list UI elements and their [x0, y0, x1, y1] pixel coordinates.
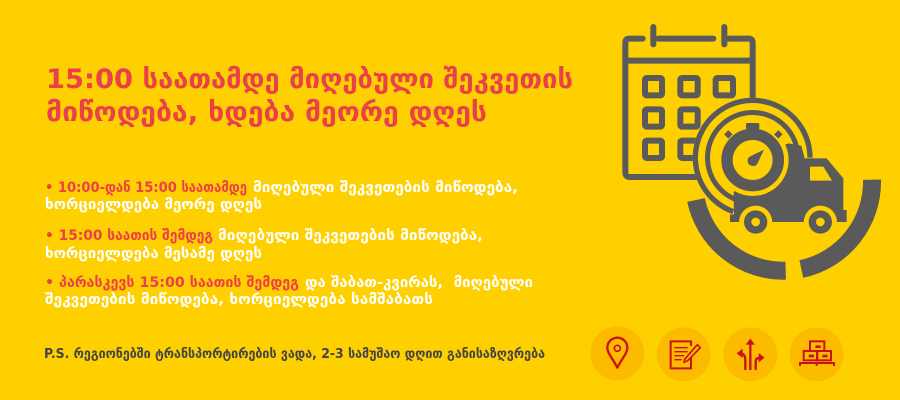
title: 15:00 საათამდე მიღებული შეკვეთის	[46, 64, 573, 95]
title	[46, 64, 573, 128]
text block: delivery rule 3: შეკვეთების მიწოდება, ხორციელდება სამშაბათს	[45, 292, 433, 308]
text block: delivery rule 2: • 15:00 საათის შემდეგ	[45, 228, 213, 244]
text block: delivery rule 2	[45, 228, 483, 262]
text block: delivery rule 2: მიღებული შეკვეთების მიწოდება,	[218, 228, 483, 244]
icon: clock rings	[693, 98, 813, 218]
text block: delivery rule 1: მიღებული შეკვეთების მიწოდება,	[253, 180, 518, 196]
text block: delivery rule 3	[45, 275, 533, 308]
text block: delivery rule 1	[45, 180, 518, 213]
icon: calendar	[625, 27, 753, 177]
icon: document and pencil	[657, 327, 711, 381]
icon: stacked boxes on pallet	[790, 327, 844, 381]
title: მიწოდება, ხდება მეორე დღეს	[46, 97, 487, 128]
text block: delivery rule 3: და შაბათ-კვირას, მიღებული	[305, 275, 533, 291]
icon: delivery truck	[730, 143, 847, 239]
text block: delivery rule 1: • 10:00-დან 15:00 საათამდე	[45, 180, 247, 196]
icon: branching arrows	[723, 327, 777, 381]
icon: stopwatch	[717, 123, 789, 196]
icon row	[590, 326, 844, 381]
text block: delivery rule 2: ხორციელდება მესამე დღეს	[45, 246, 262, 262]
text block: delivery rule 3: • პარასკევს 15:00 საათის შემდეგ	[45, 275, 299, 291]
icon: location pin	[590, 326, 644, 380]
text block: regional note: P.S. რეგიონებში ტრანსპორტირების ვადა, 2-3 სამუშაო დღით განისაზღვრება	[44, 347, 545, 362]
illustration: calendar and delivery truck	[625, 27, 872, 271]
icon: sweeping arcs	[696, 180, 872, 271]
text block: delivery rule 1: ხორციელდება მეორე დღეს	[45, 197, 262, 213]
